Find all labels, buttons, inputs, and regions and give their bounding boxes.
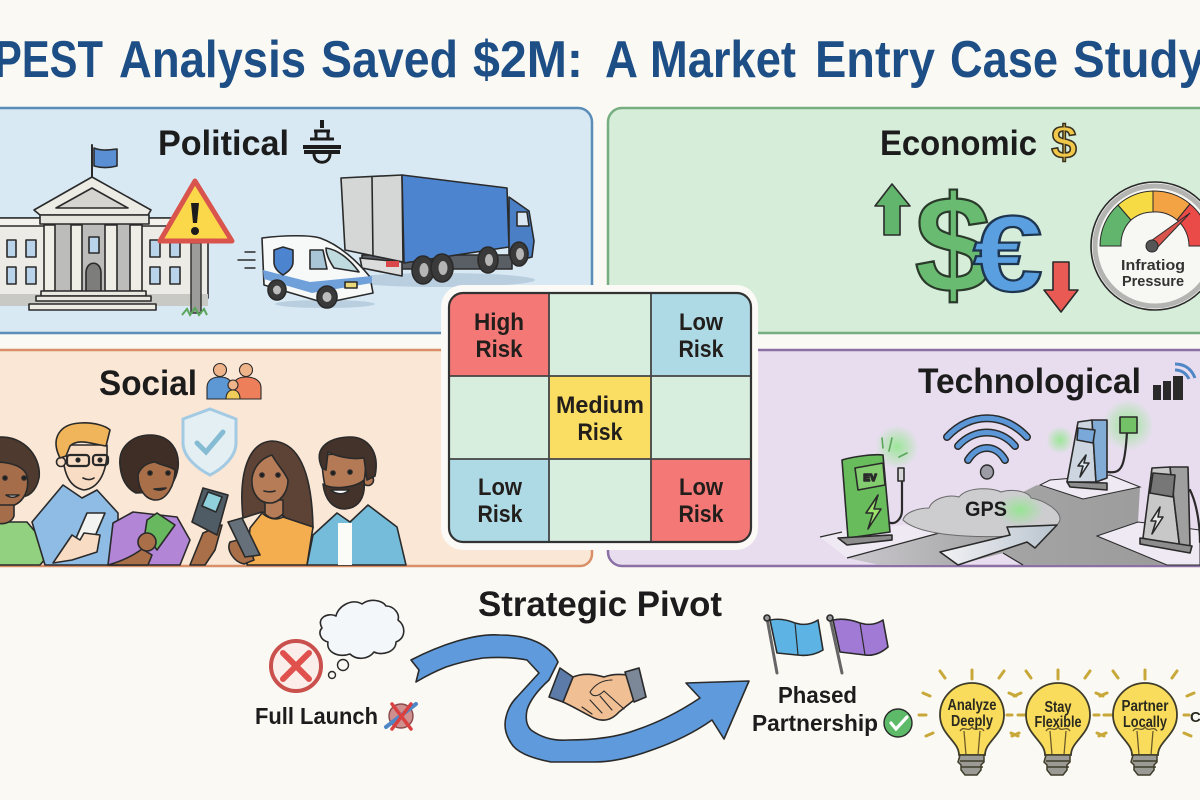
- illustration: armored van: [238, 236, 375, 308]
- cell: high risk: [449, 293, 549, 376]
- icon: connected building: [1153, 364, 1195, 400]
- title: Analysis: [119, 31, 306, 89]
- icon: lamp: [303, 120, 341, 162]
- panel: political: [0, 108, 592, 333]
- lightbulb: partner locally: Locally: [1123, 714, 1167, 731]
- gauge: inflation pressure: Pressure: [1122, 273, 1184, 290]
- lightbulb: analyze deeply: [919, 670, 1026, 775]
- risk matrix: [441, 285, 758, 550]
- gauge label: Infratiog: [1121, 257, 1185, 274]
- icon: rejected plan: [271, 600, 404, 691]
- illustration: person 3: [108, 435, 228, 565]
- title: A: [605, 31, 638, 89]
- icon: grey EV charger: [1140, 467, 1200, 553]
- lightbulb: partner locally: Partner: [1122, 698, 1168, 715]
- icon: green check: [884, 709, 912, 737]
- icon: family: [207, 364, 261, 399]
- title: Case: [950, 31, 1058, 89]
- illustration: government building: [0, 145, 208, 310]
- icon: crossed rocket: [386, 704, 416, 729]
- cell: low risk top right: [651, 293, 751, 376]
- cell: medium risk: Risk: [578, 419, 623, 446]
- icon: up arrow: [875, 184, 910, 235]
- icon: green EV charger: [838, 425, 919, 545]
- heading: social: Social: [99, 364, 197, 403]
- illustration: person 4: [228, 441, 313, 565]
- icon: down arrow: [1044, 262, 1078, 312]
- icon: partner flags: [764, 615, 888, 673]
- arrow: navigation: [940, 525, 1057, 565]
- cell: high risk: Risk: [476, 336, 523, 363]
- heading: economic: Economic: [880, 124, 1037, 163]
- cell: low risk bottom left: Risk: [478, 501, 523, 528]
- label: phased partnership: [752, 682, 878, 736]
- heading: strategic pivot: Strategic Pivot: [478, 585, 722, 624]
- title: Saved: [321, 31, 458, 89]
- icon: warning sign: [160, 181, 232, 315]
- title: [0, 31, 1200, 89]
- label: full launch: Full Launch: [255, 703, 378, 729]
- cell: low risk bottom right: Risk: [678, 501, 724, 528]
- lightbulb: analyze deeply: Deeply: [951, 713, 993, 730]
- illustration: person 2: [32, 423, 118, 565]
- cell: medium risk: Medium: [556, 392, 644, 419]
- arrow: pivot path: [411, 635, 749, 762]
- illustration: GPS cloud: [903, 489, 1060, 537]
- lightbulb: stay flexible: [1007, 670, 1112, 775]
- cell: low risk bottom right: [651, 459, 751, 542]
- lightbulb: analyze deeply: Analyze: [948, 697, 997, 714]
- cell: low risk top right: Risk: [678, 336, 724, 363]
- icon: thought cloud: [320, 600, 404, 658]
- label: phased partnership: Phased: [778, 682, 857, 708]
- title: Entry: [815, 31, 935, 89]
- illustration: truck: [341, 175, 535, 287]
- cell: high risk: High: [474, 309, 524, 336]
- title: Market: [650, 31, 796, 89]
- cell: low risk top right: Low: [679, 309, 723, 336]
- illustration: person 5: [307, 437, 406, 565]
- cell: low risk bottom left: Low: [478, 474, 522, 501]
- icon: gold dollar: $: [1051, 116, 1077, 168]
- icon: security shield: [183, 409, 236, 475]
- icon: euro symbol: €: [973, 193, 1043, 314]
- cell: medium risk: [549, 376, 651, 459]
- label: GPS: GPS: [965, 498, 1007, 521]
- panel: social: [0, 350, 592, 566]
- lightbulb: stay flexible: Flexible: [1034, 714, 1082, 731]
- panel: technological: [608, 350, 1200, 566]
- lightbulb: partner locally: [1094, 670, 1194, 775]
- label: phased partnership: Partnership: [752, 710, 878, 736]
- icon: wifi: [947, 418, 1027, 479]
- title: $2M:: [473, 31, 583, 89]
- cell: low risk bottom left: [449, 459, 549, 542]
- gauge: inflation pressure: [1091, 182, 1200, 310]
- lightbulb: stay flexible: Stay: [1044, 699, 1072, 716]
- icon: dollar symbol: $: [915, 168, 991, 322]
- icon: green EV charger: EV: [863, 473, 877, 484]
- panel: economic: [608, 108, 1200, 333]
- cell: low risk bottom right: Low: [679, 474, 723, 501]
- illustration: roads: [820, 475, 1200, 565]
- heading: technological: Technological: [918, 362, 1141, 401]
- icon: blue EV charger: [1046, 399, 1154, 490]
- heading: political: Political: [158, 124, 289, 163]
- icon: handshake: [549, 668, 646, 720]
- illustration: person 1: [0, 437, 46, 565]
